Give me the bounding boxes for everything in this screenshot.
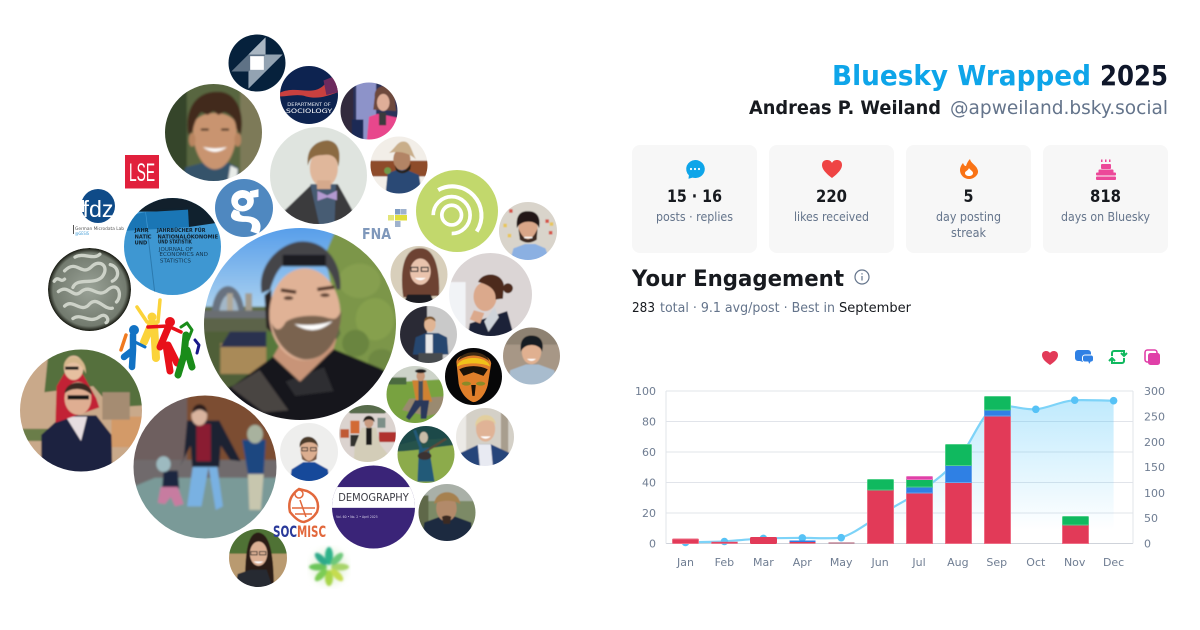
right axis labels	[1144, 385, 1165, 550]
user name and handle: @apweiland.bsky.social	[950, 97, 1168, 119]
stat card: posts and replies: posts · replies	[656, 210, 733, 224]
stat card: days on Bluesky: days on Bluesky	[1061, 210, 1150, 224]
avatar: man with ponytail in profile	[449, 253, 532, 336]
left axis labels: 40	[642, 476, 656, 490]
right axis labels: 0	[1144, 538, 1151, 550]
avatar: journal covers	[124, 198, 221, 295]
avatar: journal covers: JAHR	[134, 228, 149, 234]
avatar: Demography journal: Vol. 60 • No. 2 • April 2025	[336, 515, 378, 519]
logo: FDZ German Microdata Lab	[73, 189, 124, 236]
avatar: man and child on shoulders	[20, 350, 142, 472]
month labels: Oct	[1026, 556, 1046, 569]
stat card: likes received	[769, 145, 894, 253]
stat card: day posting streak: streak	[951, 226, 986, 240]
month labels: Jan	[676, 556, 694, 569]
line points	[682, 396, 1117, 546]
icon: quotes	[1145, 350, 1160, 365]
stat card: likes received: 220	[816, 187, 847, 207]
avatar: journal covers: NATIC	[135, 234, 152, 240]
logo: jumping people	[121, 300, 199, 375]
month labels: Jul	[911, 556, 926, 569]
stat card: posts and replies: 15 · 16	[667, 187, 722, 207]
avatar: journal covers: ECONOMICS AND	[159, 252, 208, 258]
heading: your engagement: Your Engagement	[631, 267, 844, 292]
avatar: man with flat cap	[418, 484, 476, 541]
avatar: orange mask artwork	[445, 348, 502, 405]
right axis labels: 200	[1144, 436, 1165, 449]
month labels: Nov	[1064, 556, 1086, 569]
avatar: department of sociology: SOCIOLOGY	[286, 109, 333, 115]
avatar: g logo	[215, 179, 273, 237]
avatar: man in grey-blue shirt	[503, 328, 560, 384]
avatar: geometric logo	[228, 34, 286, 92]
logo: FNA: FNA	[362, 225, 391, 243]
combo chart: monthly engagement	[635, 385, 1165, 569]
title: 2025	[1100, 59, 1168, 92]
avatar: journal covers: UND STATISTIK	[158, 240, 193, 246]
logo: LSE: LSE	[129, 159, 155, 187]
avatar: man with bow tie	[270, 127, 367, 224]
icon: info	[855, 270, 869, 284]
left axis labels: 0	[649, 538, 656, 550]
left axis labels: 60	[642, 446, 656, 459]
logo: SOCMISC: MISC	[297, 522, 326, 541]
left axis labels: 100	[635, 385, 656, 398]
icon: reposts	[1109, 351, 1127, 363]
area under cumulative line	[686, 400, 1114, 544]
stat card: posts and replies	[632, 145, 757, 253]
stat card: day posting streak	[906, 145, 1031, 253]
avatar: blonde man in navy suit	[456, 408, 514, 466]
avatar: Demography journal: DEMOGRAPHY	[338, 492, 409, 504]
icon: birthday cake	[1096, 160, 1116, 180]
right axis labels: 150	[1144, 461, 1165, 474]
month labels: Dec	[1103, 556, 1124, 569]
stat card: day posting streak: 5	[964, 187, 974, 207]
logo: SOCMISC: SOC	[273, 522, 297, 541]
avatar: woman with glasses	[390, 246, 448, 303]
main avatar: selfie at Sydney Harbour Bridge	[204, 228, 396, 420]
avatar: journal covers: NATIONALÖKONOMIE	[157, 233, 219, 240]
cumulative line	[686, 400, 1114, 542]
icon: chat bubble	[686, 160, 705, 179]
left axis labels: 80	[642, 416, 656, 428]
stat card: days on Bluesky: 818	[1090, 187, 1121, 207]
engagement summary	[632, 301, 912, 316]
logo: SOCMISC	[273, 489, 326, 541]
stat card: day posting streak: day posting	[936, 210, 1001, 224]
icon: replies	[1075, 350, 1094, 365]
icon: likes	[1042, 351, 1058, 365]
avatar: man with brown hair	[165, 84, 262, 181]
logo: FDZ German Microdata Lab: fdz	[82, 196, 114, 222]
stat card: days on Bluesky	[1043, 145, 1168, 253]
avatar: journal covers: JAHRBÜCHER FÜR	[156, 227, 206, 234]
avatar: man presenting in dark suit	[400, 306, 457, 363]
icon: heart	[822, 160, 842, 178]
icon: flame	[960, 159, 978, 179]
avatar: bearded man in blue shirt	[499, 202, 557, 260]
avatar: journal covers: UND	[135, 241, 147, 247]
right axis labels: 100	[1144, 487, 1165, 500]
avatar: journal covers: STATISTICS	[160, 259, 191, 265]
avatar: woman with long dark hair	[229, 529, 287, 587]
stat card: likes received: likes received	[794, 210, 869, 224]
logo: FNA	[362, 209, 407, 243]
gridlines	[666, 391, 1133, 544]
right axis labels: 250	[1144, 410, 1165, 424]
avatar: woman with guitar in meadow	[398, 426, 454, 483]
engagement summary: September	[839, 301, 912, 316]
month labels: Apr	[793, 556, 812, 569]
month labels: May	[830, 556, 853, 569]
avatar bubble cluster	[2, 34, 569, 596]
right axis labels: 50	[1144, 512, 1158, 525]
logo: FDZ German Microdata Lab: @GESIS	[75, 231, 89, 236]
right axis labels: 300	[1144, 385, 1165, 398]
user name and handle: Andreas P. Weiland	[749, 97, 941, 119]
avatar: journal covers: JOURNAL OF	[158, 247, 193, 253]
avatar: man in orange jacket on rock	[386, 366, 444, 423]
left axis labels: 20	[642, 507, 656, 520]
month labels: Feb	[715, 556, 734, 569]
engagement summary: 283	[632, 301, 655, 316]
avatar: Demography journal	[332, 466, 415, 548]
logo: FDZ German Microdata Lab: German Microdata Lab	[75, 226, 124, 232]
avatar: man in straw hat	[370, 136, 428, 194]
logo: LSE	[125, 155, 159, 188]
avatar: department of sociology: DEPARTMENT OF	[287, 102, 332, 107]
month labels: Jun	[871, 556, 889, 569]
stacked bars	[672, 396, 1088, 544]
user name and handle	[749, 97, 1168, 119]
title: Bluesky Wrapped	[832, 59, 1091, 92]
avatar: woman in pink blazer	[340, 82, 398, 140]
engagement summary: total · 9.1 avg/post · Best in	[660, 301, 835, 316]
month labels	[676, 556, 1124, 569]
avatar: man with glasses in blue shirt	[280, 423, 338, 481]
left axis labels	[635, 385, 656, 550]
chart legend icons	[1042, 350, 1160, 365]
avatar: department of sociology	[280, 66, 338, 124]
avatar: family holding hands	[134, 396, 276, 538]
month labels: Sep	[986, 556, 1007, 569]
avatar: woman in studio with posters	[339, 405, 396, 462]
month labels: Mar	[753, 556, 774, 569]
month labels: Aug	[947, 556, 969, 569]
avatar: brain coral sphere	[48, 248, 131, 331]
logo: green flower	[309, 547, 349, 586]
avatar: green radar logo	[416, 170, 498, 252]
